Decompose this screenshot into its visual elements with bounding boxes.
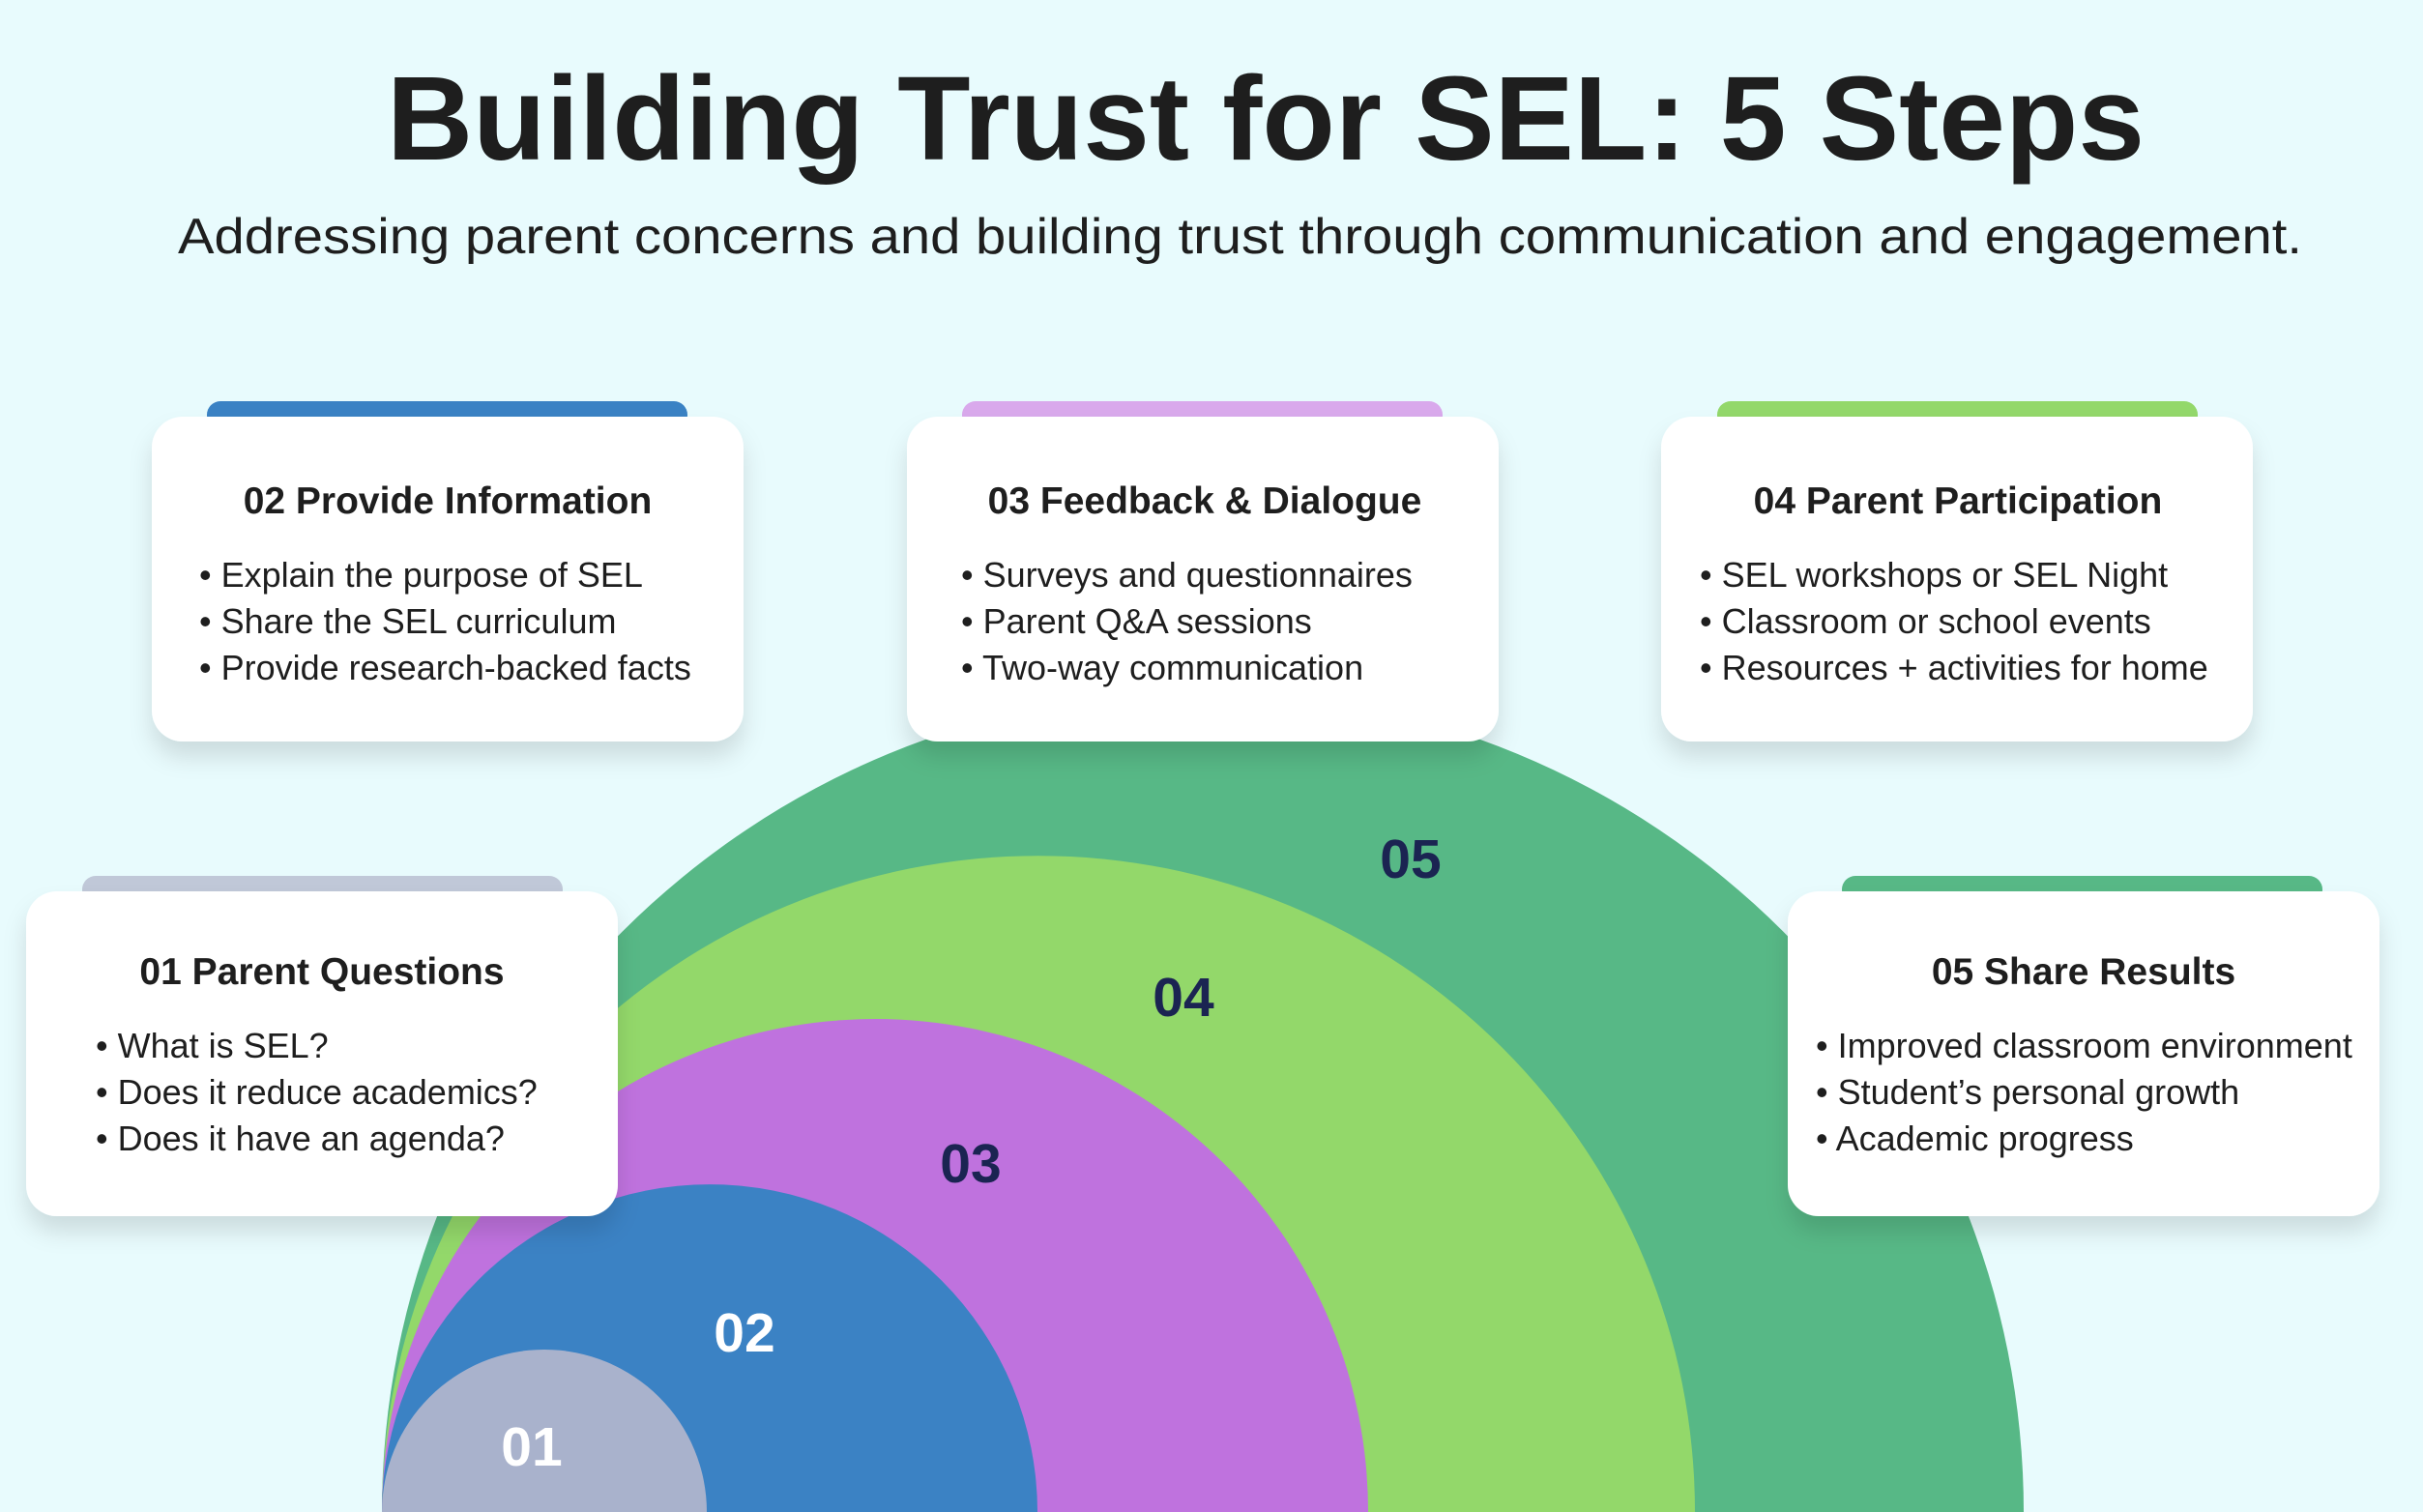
panel: 05 Share Results: • Academic progress [1816,1119,2134,1158]
panel: 01 Parent Questions: 01 Parent Questions [139,951,505,993]
panel: 02 Provide Information: • Explain the purpose of SEL [199,555,643,595]
panel: 01 Parent Questions: • Does it reduce academics? [96,1072,538,1112]
panel: 04 Parent Participation: 04 Parent Participation [1754,480,2162,522]
panel: 03 Feedback & Dialogue [907,401,1499,741]
panel: 01 Parent Questions: • What is SEL? [96,1026,329,1065]
panel: 05 Share Results: • Student’s personal growth [1816,1072,2239,1112]
label 01: 01 [501,1416,563,1478]
panel: 05 Share Results: • Improved classroom environment [1816,1026,2352,1065]
chart: nested semicircles [382,691,2024,1512]
label 03: 03 [940,1133,1002,1195]
panel: 03 Feedback & Dialogue: 03 Feedback & Dialogue [988,480,1421,522]
panel: 05 Share Results: 05 Share Results [1932,951,2235,993]
panel: 02 Provide Information [152,401,744,741]
panel: 05 Share Results [1788,876,2379,1216]
circle 02 [382,1184,1037,1512]
title: Building Trust for SEL: 5 Steps [387,53,2145,186]
panel: 01 Parent Questions [26,876,618,1216]
circle 05 [382,691,2024,1512]
panel: 03 Feedback & Dialogue: • Parent Q&A sessions [961,601,1312,641]
label 05: 05 [1380,829,1442,890]
circle 03 [382,1019,1368,1512]
panel: 02 Provide Information: 02 Provide Information [244,480,652,522]
panel: 02 Provide Information: • Share the SEL curriculum [199,601,616,641]
panel: 02 Provide Information: • Provide research-backed facts [199,648,691,687]
panel: 03 Feedback & Dialogue: • Two-way communication [961,648,1363,687]
subtitle: Addressing parent concerns and building trust through communication and engagement. [178,209,2302,265]
circle 01 [382,1350,707,1512]
panel: 03 Feedback & Dialogue: • Surveys and questionnaires [961,555,1413,595]
panel: 04 Parent Participation: • Classroom or school events [1700,601,2151,641]
panel: 04 Parent Participation: • Resources + activities for home [1700,648,2208,687]
panel: 01 Parent Questions: • Does it have an agenda? [96,1119,505,1158]
panel: 04 Parent Participation: • SEL workshops or SEL Night [1700,555,2168,595]
label 04: 04 [1153,967,1214,1029]
label 02: 02 [714,1302,775,1364]
circle 04 [382,856,1695,1512]
panel: 04 Parent Participation [1661,401,2253,741]
